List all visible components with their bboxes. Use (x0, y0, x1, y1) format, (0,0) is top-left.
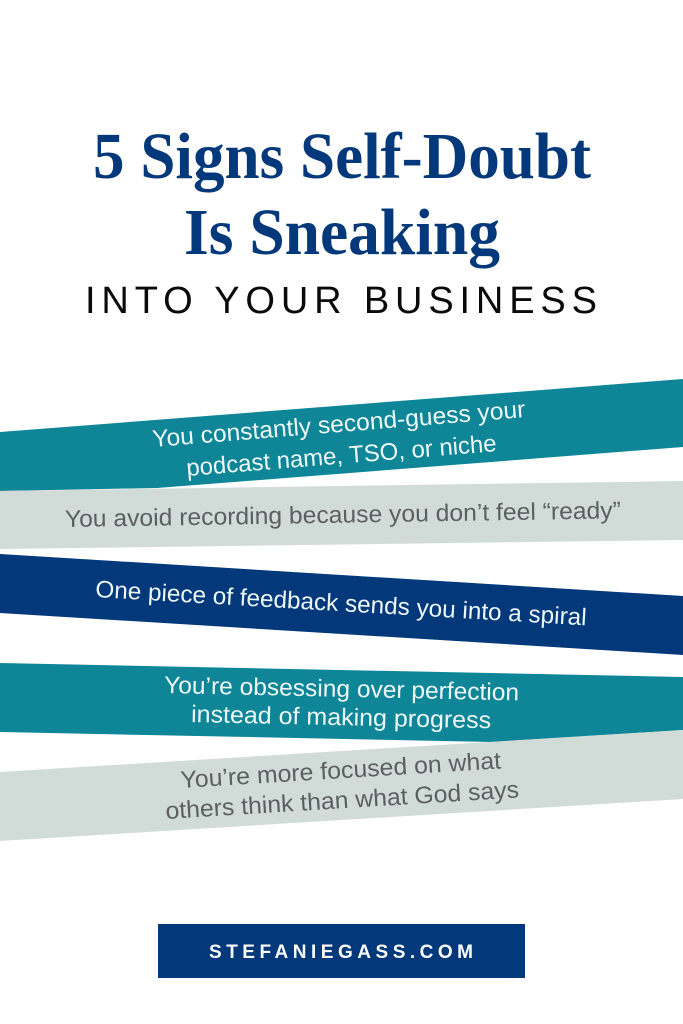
title: 5 Signs Self-Doubt (93, 120, 591, 193)
title (93, 120, 591, 269)
band 4: perfection: You’re obsessing over perfection (164, 672, 519, 706)
band 3: feedback (0, 554, 683, 655)
band 2: avoid recording (0, 481, 683, 549)
band 1: second-guess (0, 379, 683, 491)
website button (158, 924, 525, 978)
band 5: others think (0, 730, 683, 841)
subtitle: INTO YOUR BUSINESS (85, 280, 597, 322)
band 5: others think: You’re more focused on what (180, 747, 502, 794)
band 2: avoid recording: You avoid recording because you don’t feel “ready” (65, 497, 621, 533)
band 5: others think: others think than what God says (165, 776, 520, 825)
band 1: second-guess: You constantly second-guess your (151, 396, 526, 453)
band 4: perfection (0, 663, 683, 742)
band 4: perfection: instead of making progress (191, 701, 491, 734)
title: Is Sneaking (184, 196, 500, 269)
band 1: second-guess: podcast name, TSO, or niche (185, 430, 497, 482)
website button: STEFANIEGASS.COM (209, 942, 473, 963)
band 3: feedback: One piece of feedback sends you into a spiral (95, 576, 587, 631)
